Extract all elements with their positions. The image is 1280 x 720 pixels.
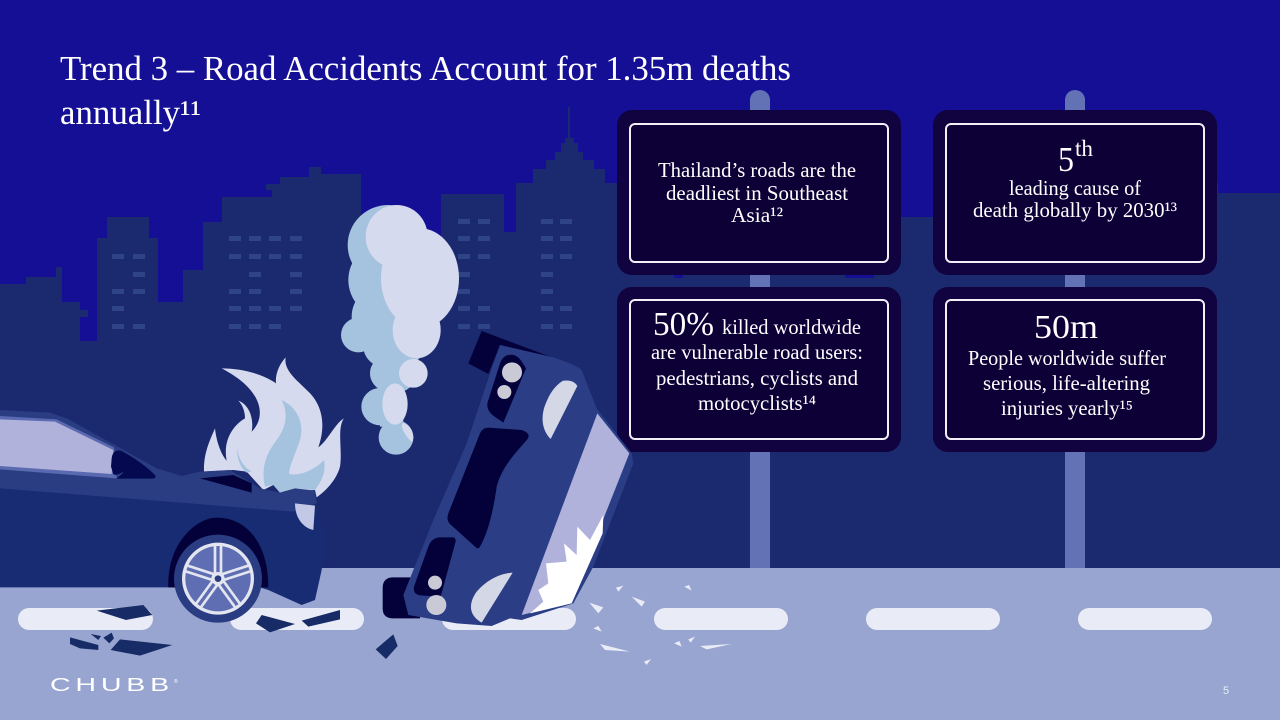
car: burning sedan: [0, 357, 398, 659]
windscreen crack: [530, 515, 603, 613]
wheel arch: [168, 518, 268, 587]
panel: 50% killed worldwide: pedestrians, cyclists and: [656, 366, 858, 390]
panel: Thailand's roads: deadliest in Southeast: [666, 181, 848, 205]
skyline windows: [112, 219, 572, 329]
car body lower: [0, 487, 325, 605]
car body: [403, 345, 633, 626]
panel: 5th leading cause: leading cause of: [1009, 176, 1141, 200]
road: [0, 568, 1280, 720]
headlight: [295, 503, 315, 530]
panel: 50m injuries: [933, 287, 1217, 452]
panel: 50m injuries: 50m: [1034, 309, 1098, 346]
title: annually¹¹: [60, 94, 201, 132]
side window: [0, 419, 113, 474]
wheel: [174, 535, 262, 623]
city skyline: [0, 107, 1280, 600]
panel: Thailand's roads: Asia¹²: [731, 203, 783, 227]
panel: 50% killed worldwide: 50%: [653, 306, 714, 343]
road lane markings: [18, 608, 1212, 630]
panel: 50m injuries: injuries yearly¹⁵: [1001, 396, 1133, 420]
logo: Chubb: CHUBB: [50, 675, 174, 695]
windshield: [111, 450, 155, 479]
tyres: [383, 331, 550, 618]
panel: 5th leading cause: [933, 110, 1217, 275]
car: overturned car: [383, 331, 732, 665]
panel: Thailand's roads: Thailand’s roads are the: [658, 158, 856, 182]
glass shards: [589, 585, 732, 665]
grille: [447, 428, 529, 548]
side window trim: [0, 416, 117, 478]
smoke cloud: [341, 205, 459, 455]
title: [60, 50, 791, 132]
panel: Thailand's roads: [617, 110, 901, 275]
panel: 5th leading cause: 5: [1058, 140, 1074, 179]
panel: 50m injuries: serious, life-altering: [983, 371, 1150, 395]
panel: 50% killed worldwide: motocyclists¹⁴: [698, 391, 816, 415]
sign posts: [750, 90, 1085, 568]
icon: flames: [204, 357, 344, 497]
car body upper: [0, 410, 317, 512]
panel: 5th leading cause: death globally by 2030¹³: [973, 198, 1177, 222]
panel: 50% killed worldwide: killed worldwide: [722, 315, 861, 339]
panel: 50% killed worldwide: are vulnerable road users:: [651, 340, 863, 364]
page number: 5: [1223, 685, 1229, 697]
logo: Chubb: [50, 675, 178, 695]
panel: 5th leading cause: th: [1075, 136, 1094, 161]
panel: 50% killed worldwide: [617, 287, 901, 452]
logo: Chubb: ®: [174, 678, 178, 685]
windscreen: [522, 413, 629, 615]
debris: dark fragments: [70, 605, 398, 659]
title: Trend 3 – Road Accidents Account for 1.35m deaths: [60, 50, 791, 88]
hood gap: [200, 475, 252, 493]
light housing bottom: [414, 537, 456, 597]
panel: 50m injuries: People worldwide suffer: [968, 346, 1166, 370]
headlights: [426, 362, 522, 615]
fog lamps: [471, 380, 577, 623]
light housing top: [487, 355, 526, 423]
